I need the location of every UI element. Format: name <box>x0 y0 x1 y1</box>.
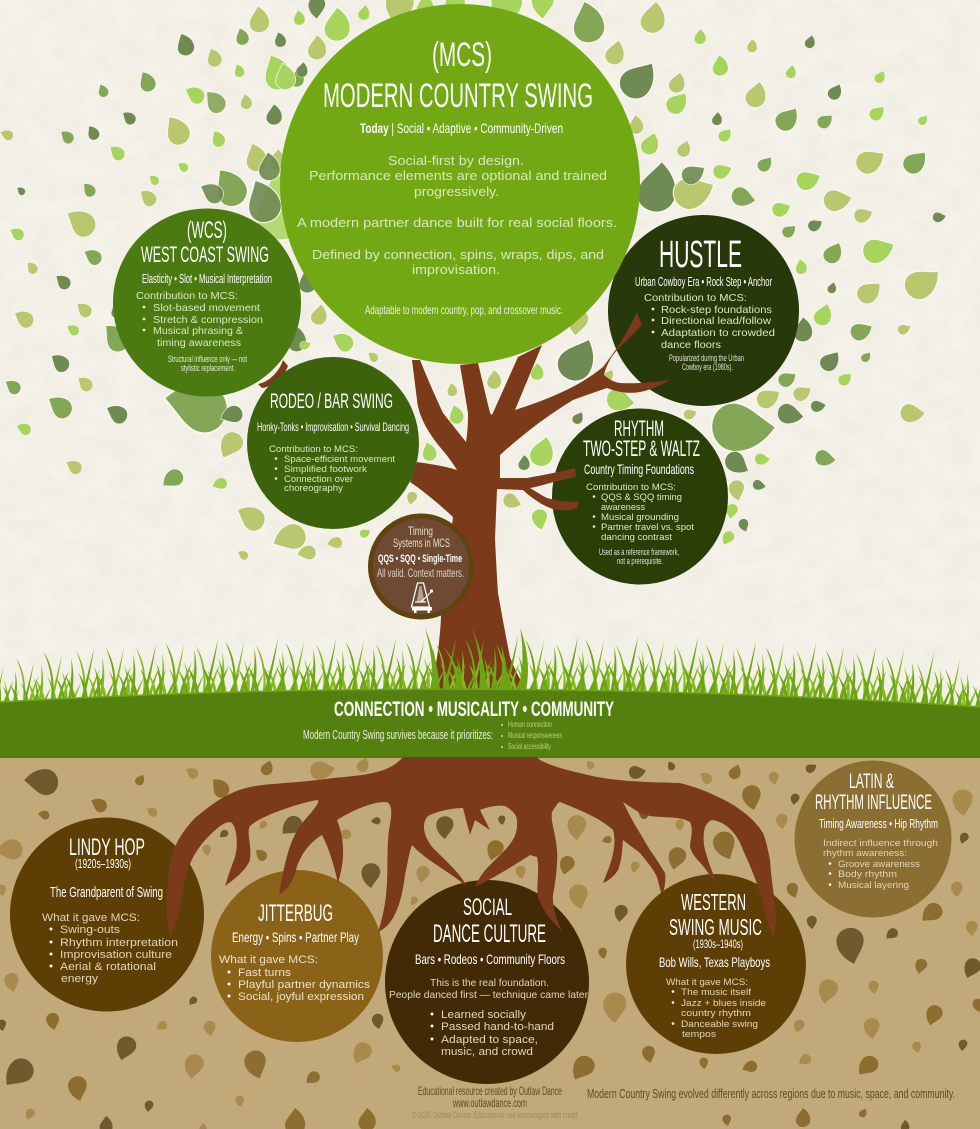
soil leaves <box>0 756 980 1129</box>
panel: Rodeo / Bar Swing <box>247 357 419 529</box>
soil background <box>0 757 980 1129</box>
note: MCS: Adaptable to modern country, pop, and crossover music. <box>365 303 563 317</box>
heading: Rodeo: RODEO / BAR SWING <box>270 389 393 413</box>
circle: Latin <box>794 760 952 918</box>
tree trunk and branches <box>258 312 670 692</box>
subtitle: Rhythm: Country Timing Foundations <box>584 461 694 477</box>
contribution list: Hustle: Directional lead/follow <box>661 315 771 327</box>
contribution list: Jitterbug <box>219 954 371 1003</box>
subtitle: Timing: QQS • SQQ • Single-Time <box>378 553 462 565</box>
footer credits: Educational resource created by Outlaw Dance <box>418 1084 562 1098</box>
icon: metronome <box>412 583 433 613</box>
subtitle: Lindy Hop: The Grandparent of Swing <box>50 885 163 901</box>
bullet list: Social Dance Culture: Learned socially <box>441 1009 527 1021</box>
contribution list: Western Swing: tempos <box>682 1029 716 1040</box>
contribution list: Jitterbug: Social, joyful expression <box>238 991 364 1003</box>
priorities list <box>501 720 562 751</box>
body text: MCS: A modern partner dance built for real social floors. <box>297 216 617 230</box>
contribution list: Jitterbug: Fast turns <box>238 967 292 979</box>
panel: Social Dance Culture <box>385 880 589 1084</box>
panel: Hustle <box>608 215 799 406</box>
heading: MCS: MODERN COUNTRY SWING <box>323 77 593 115</box>
contribution list: Western Swing <box>666 977 766 1040</box>
caption: Timing: All valid. Context matters. <box>377 566 464 580</box>
heading: WCS <box>141 217 269 267</box>
circle: WCS <box>113 208 301 396</box>
heading: Rhythm: TWO-STEP & WALTZ <box>583 436 700 461</box>
circle: Lindy Hop <box>10 818 204 1012</box>
contribution list: Hustle: Contribution to MCS: <box>644 292 747 304</box>
bullet list: Social Dance Culture: Passed hand-to-hand <box>441 1021 554 1033</box>
bullet list: Social Dance Culture <box>430 1009 554 1058</box>
band message <box>303 698 614 751</box>
heading: Lindy Hop: (1920s–1930s) <box>75 856 131 871</box>
body text: MCS: Defined by connection, spins, wraps, dips, and <box>312 248 604 262</box>
note: Rhythm: Used as a reference framework, <box>599 547 679 558</box>
branch: West Coast Swing <box>258 360 288 388</box>
panel: Modern Country Swing <box>280 4 640 364</box>
body text: MCS: progressively. <box>414 185 499 199</box>
contribution list: Latin: Groove awareness <box>838 859 920 870</box>
heading: MCS <box>323 36 593 115</box>
footer credits <box>412 1084 579 1121</box>
contribution list: Western Swing: Danceable swing <box>681 1019 758 1030</box>
contribution list: Latin: Musical layering <box>838 880 909 891</box>
contribution list: WCS: Musical phrasing & <box>153 325 243 337</box>
contribution list: Rodeo: Space-efficient movement <box>284 454 396 464</box>
contribution list: Jitterbug: Playful partner dynamics <box>238 979 371 991</box>
contribution list: Latin: Body rhythm <box>838 869 897 880</box>
tree canopy leaves <box>0 0 947 562</box>
contribution list: Lindy Hop: What it gave MCS: <box>42 912 140 924</box>
heading: Timing: Systems in MCS <box>393 536 450 550</box>
subtitle: Rodeo: Honky-Tonks • Improvisation • Survival Dancing <box>257 420 409 434</box>
contribution list: Western Swing: Jazz + blues inside <box>681 998 766 1009</box>
panel: Rhythm Two-Step and Waltz <box>552 408 728 584</box>
heading: MCS: (MCS) <box>432 36 492 74</box>
note: Rhythm: not a prerequisite. <box>617 556 663 567</box>
note: WCS: stylistic replacement. <box>181 363 235 374</box>
body text: MCS: improvisation. <box>412 263 500 277</box>
heading: Western Swing: (1930s–1940s) <box>693 937 743 951</box>
contribution list: Hustle: dance floors <box>661 339 721 351</box>
heading: Latin: LATIN & <box>849 770 894 793</box>
heading: Western Swing: WESTERN <box>681 889 746 915</box>
contribution list: WCS: Slot-based movement <box>153 302 260 314</box>
contribution list: Rhythm: Partner travel vs. spot <box>601 522 694 533</box>
contribution list: Lindy Hop: Rhythm interpretation <box>60 937 178 949</box>
subtitle: Western Swing: Bob Wills, Texas Playboys <box>659 954 770 970</box>
contribution list: Rhythm: awareness <box>601 502 645 513</box>
contribution list: Rhythm: dancing contrast <box>601 532 672 543</box>
heading: Lindy Hop: LINDY HOP <box>69 834 145 861</box>
priorities list: Human connection <box>508 720 552 729</box>
hill band <box>0 689 980 758</box>
bullet list: Social Dance Culture: Adapted to space, <box>441 1034 538 1046</box>
contribution list: Rodeo: Contribution to MCS: <box>269 444 358 454</box>
contribution list: Rodeo <box>269 444 396 493</box>
contribution list: Rhythm: Musical grounding <box>601 512 679 523</box>
heading: Social Dance Culture: SOCIAL <box>463 894 512 921</box>
heading: WCS: WEST COAST SWING <box>141 242 269 267</box>
circle: Timing <box>370 516 472 617</box>
contribution list: Latin <box>823 838 938 891</box>
contribution list: Western Swing: What it gave MCS: <box>666 977 748 988</box>
grass <box>0 628 980 711</box>
body text: MCS: Performance elements are optional and trained <box>309 169 607 183</box>
subtitle: WCS: Elasticity • Slot • Musical Interpretation <box>142 272 272 286</box>
circle: Hustle <box>608 215 799 406</box>
circle: Western Swing <box>626 874 806 1054</box>
heading: Social Dance Culture <box>433 894 546 948</box>
body text: MCS <box>297 154 617 277</box>
footer credits: www.outlawdance.com <box>452 1096 527 1110</box>
panel: Latin and Rhythm Influence <box>794 760 952 918</box>
panel: Timing Systems <box>370 516 472 617</box>
contribution list: Jitterbug: What it gave MCS: <box>219 954 318 966</box>
note: Hustle <box>669 353 744 372</box>
heading: Jitterbug: JITTERBUG <box>258 900 333 927</box>
contribution list: Rhythm: QQS & SQQ timing <box>601 492 682 503</box>
contribution list: Rhythm <box>586 482 694 543</box>
heading: Rhythm <box>583 416 700 461</box>
contribution list: Rhythm: Contribution to MCS: <box>586 482 676 493</box>
paper background <box>0 0 980 760</box>
heading: pillars: CONNECTION • MUSICALITY • COMMUNITY <box>334 698 614 721</box>
contribution list: Latin: rhythm awareness: <box>823 848 907 859</box>
heading: Latin <box>815 770 932 814</box>
heading: Western Swing: SWING MUSIC <box>669 914 762 940</box>
note: Hustle: Cowboy era (1980s). <box>682 362 733 372</box>
panel: Western Swing Music <box>626 874 806 1054</box>
priorities list: Musical responsiveness <box>508 731 562 740</box>
heading: Social Dance Culture: DANCE CULTURE <box>433 920 546 948</box>
heading: WCS: (WCS) <box>187 217 227 244</box>
body text: Social Dance Culture: People danced first — technique came later <box>389 989 588 1001</box>
heading: Hustle: HUSTLE <box>659 234 742 276</box>
contribution list: Latin: Indirect influence through <box>823 838 938 849</box>
contribution list: Hustle: Adaptation to crowded <box>661 327 775 339</box>
subtitle: Hustle: Urban Cowboy Era • Rock Step • Anchor <box>635 275 772 289</box>
contribution list: Hustle: Rock-step foundations <box>661 304 772 316</box>
circle: Rodeo <box>247 357 419 529</box>
note: WCS <box>168 354 247 374</box>
heading: Lindy Hop <box>69 834 145 871</box>
heading: Western Swing <box>669 889 762 951</box>
statement: Modern Country Swing survives because it prioritizes: <box>303 728 493 742</box>
contribution list: Rodeo: choreography <box>284 483 344 493</box>
contribution list: Rodeo: Simplified footwork <box>284 464 368 474</box>
heading: Rhythm: RHYTHM <box>614 416 664 441</box>
contribution list: Rodeo: Connection over <box>284 474 353 484</box>
subtitle: MCS: Today | Social • Adaptive • Community-Driven <box>360 120 563 136</box>
contribution list: WCS: Stretch & compression <box>153 314 263 326</box>
contribution list: Lindy Hop: Aerial & rotational <box>60 961 156 973</box>
note: Rhythm <box>599 547 679 567</box>
note: WCS: Structural influence only — not <box>168 354 247 365</box>
contribution list: WCS: timing awareness <box>157 337 241 349</box>
subtitle: Jitterbug: Energy • Spins • Partner Play <box>232 929 359 945</box>
contribution list: Hustle <box>644 292 775 351</box>
circle: Rhythm <box>552 408 728 584</box>
roots <box>167 757 776 937</box>
bullet list: Social Dance Culture: music, and crowd <box>441 1046 533 1058</box>
contribution list: Lindy Hop <box>42 912 178 985</box>
heading: Timing: Timing <box>408 524 433 538</box>
subtitle: Social Dance Culture: Bars • Rodeos • Community Floors <box>415 951 565 967</box>
contribution list: Western Swing: country rhythm <box>681 1008 751 1019</box>
body text: Social Dance Culture: This is the real foundation. <box>430 977 549 989</box>
note: Hustle: Popularized during the Urban <box>669 353 744 363</box>
panel: Lindy Hop <box>10 818 204 1012</box>
body text: Social Dance Culture <box>389 977 588 1001</box>
circle: MCS <box>280 4 640 364</box>
contribution list: Lindy Hop: Improvisation culture <box>60 949 172 961</box>
contribution list: Lindy Hop: energy <box>61 973 99 985</box>
contribution list: WCS <box>136 290 263 349</box>
contribution list: Lindy Hop: Swing-outs <box>60 924 121 936</box>
heading: Timing <box>393 524 450 550</box>
circle: Jitterbug <box>211 870 383 1042</box>
panel: Jitterbug <box>211 870 383 1042</box>
contribution list: Western Swing: The music itself <box>681 987 751 998</box>
body text: MCS: Social-first by design. <box>388 154 524 168</box>
panel: West Coast Swing <box>113 208 301 396</box>
contribution list: WCS: Contribution to MCS: <box>136 290 238 302</box>
priorities list: Social accessibility <box>508 742 551 751</box>
footer credits: © 2025 Outlaw Dance. Educational use encouraged with credit. <box>412 1110 579 1121</box>
circle: Social Dance Culture <box>385 880 589 1084</box>
